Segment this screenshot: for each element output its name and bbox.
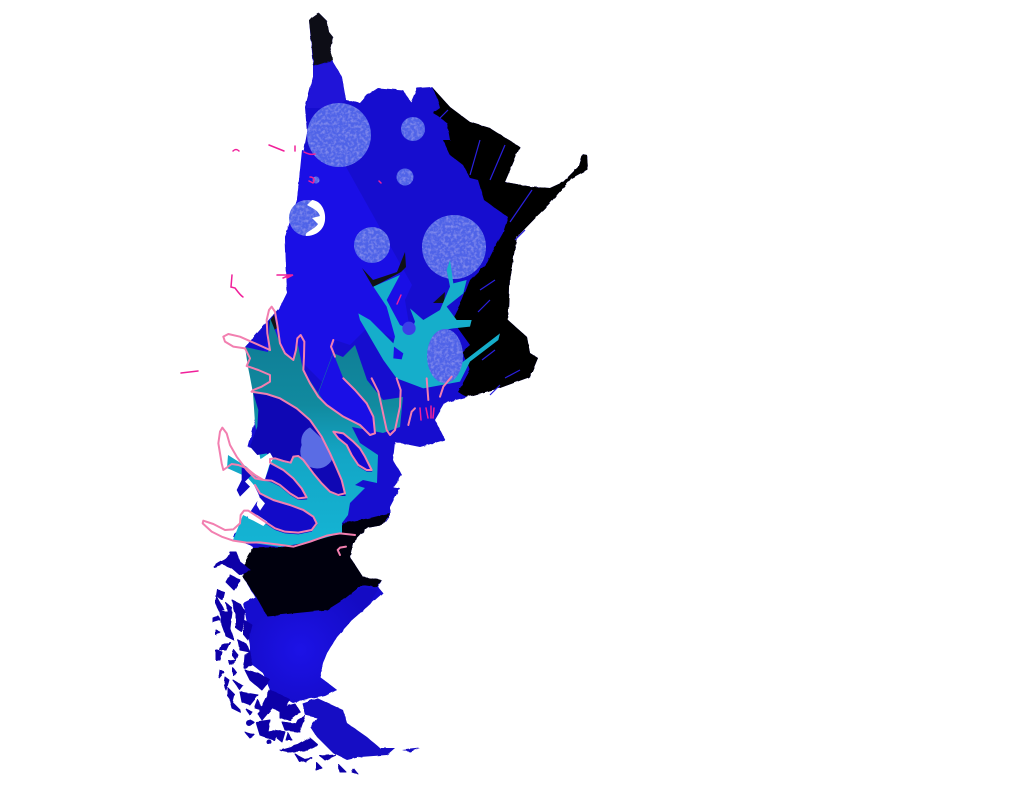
dark west-coast inlet: [237, 465, 252, 497]
teal coral: lower: [227, 318, 403, 547]
white gaps on west coast: [248, 453, 273, 479]
northern wash: [306, 62, 346, 108]
pale circle over upper coral: [427, 329, 463, 383]
black region: north-east: [432, 87, 588, 397]
outline: small hook south: [338, 547, 346, 555]
white crescent in circle: [306, 200, 325, 236]
patagonia lighter wash: [247, 587, 378, 700]
outline: second strand: [343, 378, 367, 403]
outline: third strand: [372, 378, 401, 435]
pale circle on lower coral: [300, 427, 333, 469]
small black wedges: [269, 252, 445, 333]
outline: upper strand: [267, 307, 375, 435]
west coast islands: [213, 552, 358, 774]
blue streaks on black: [440, 110, 532, 395]
outline: hook: [331, 340, 335, 357]
lower coral group: [203, 307, 452, 555]
outline: inner curl: [245, 348, 270, 392]
tierra del fuego: [302, 698, 420, 760]
outline: far-left upper loop: [223, 334, 270, 350]
teal coral: upper: [358, 260, 500, 388]
blue lobes inside lower coral: [318, 353, 375, 435]
lighter diagonal wash: [260, 150, 412, 390]
magenta ticks: [181, 145, 434, 420]
blue gap in upper coral: [393, 347, 403, 359]
pale patch in upper coral: [402, 322, 416, 335]
pink leaf outlines: [203, 307, 452, 555]
outline: small lobe: [333, 432, 372, 470]
black region: southern band: [243, 513, 390, 616]
pale circles upper map: [289, 103, 486, 279]
outline: southern lobe and coast line: [203, 485, 355, 547]
outline: right strands: [427, 378, 428, 400]
outline: main lower lobe and far-left loop: [218, 392, 345, 498]
black region: northern tip: [309, 13, 333, 66]
country base: mainland: [233, 13, 588, 703]
